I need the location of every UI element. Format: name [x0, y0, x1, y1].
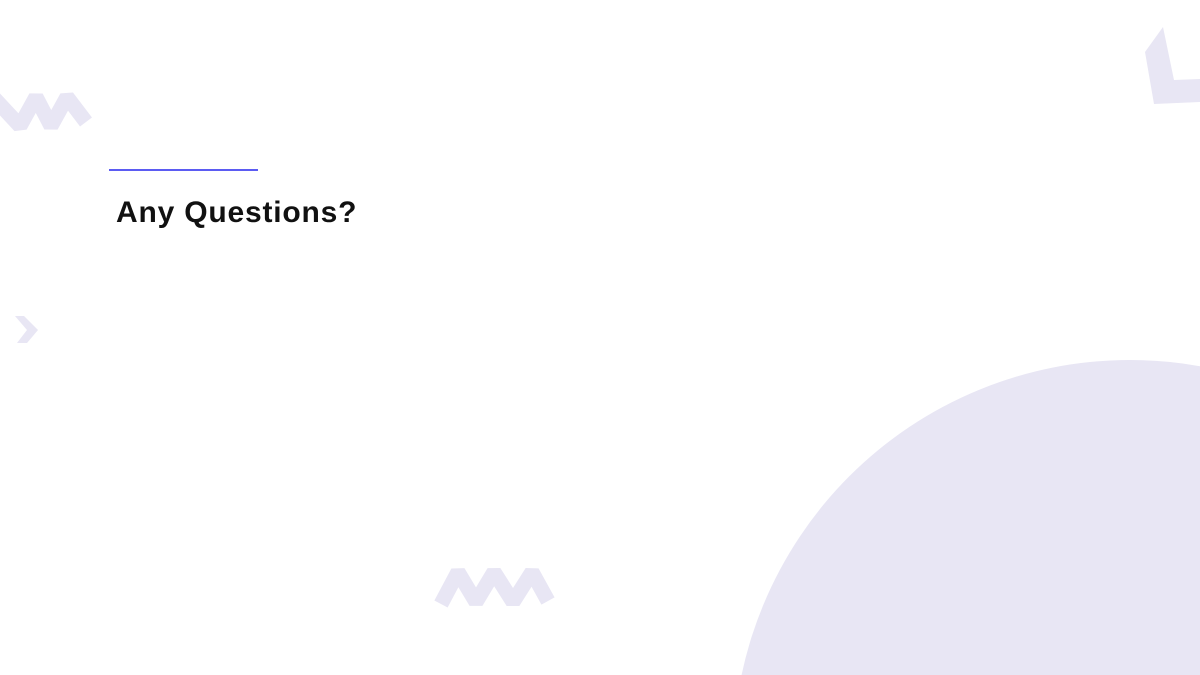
- zigzag bottom: [441, 572, 548, 604]
- big circle: [733, 360, 1200, 675]
- L shape top-right: [1145, 27, 1200, 104]
- chevron: [15, 316, 38, 343]
- accent line: [109, 169, 258, 171]
- title: Any Questions?: [116, 196, 357, 229]
- zigzag top-left: [0, 97, 86, 126]
